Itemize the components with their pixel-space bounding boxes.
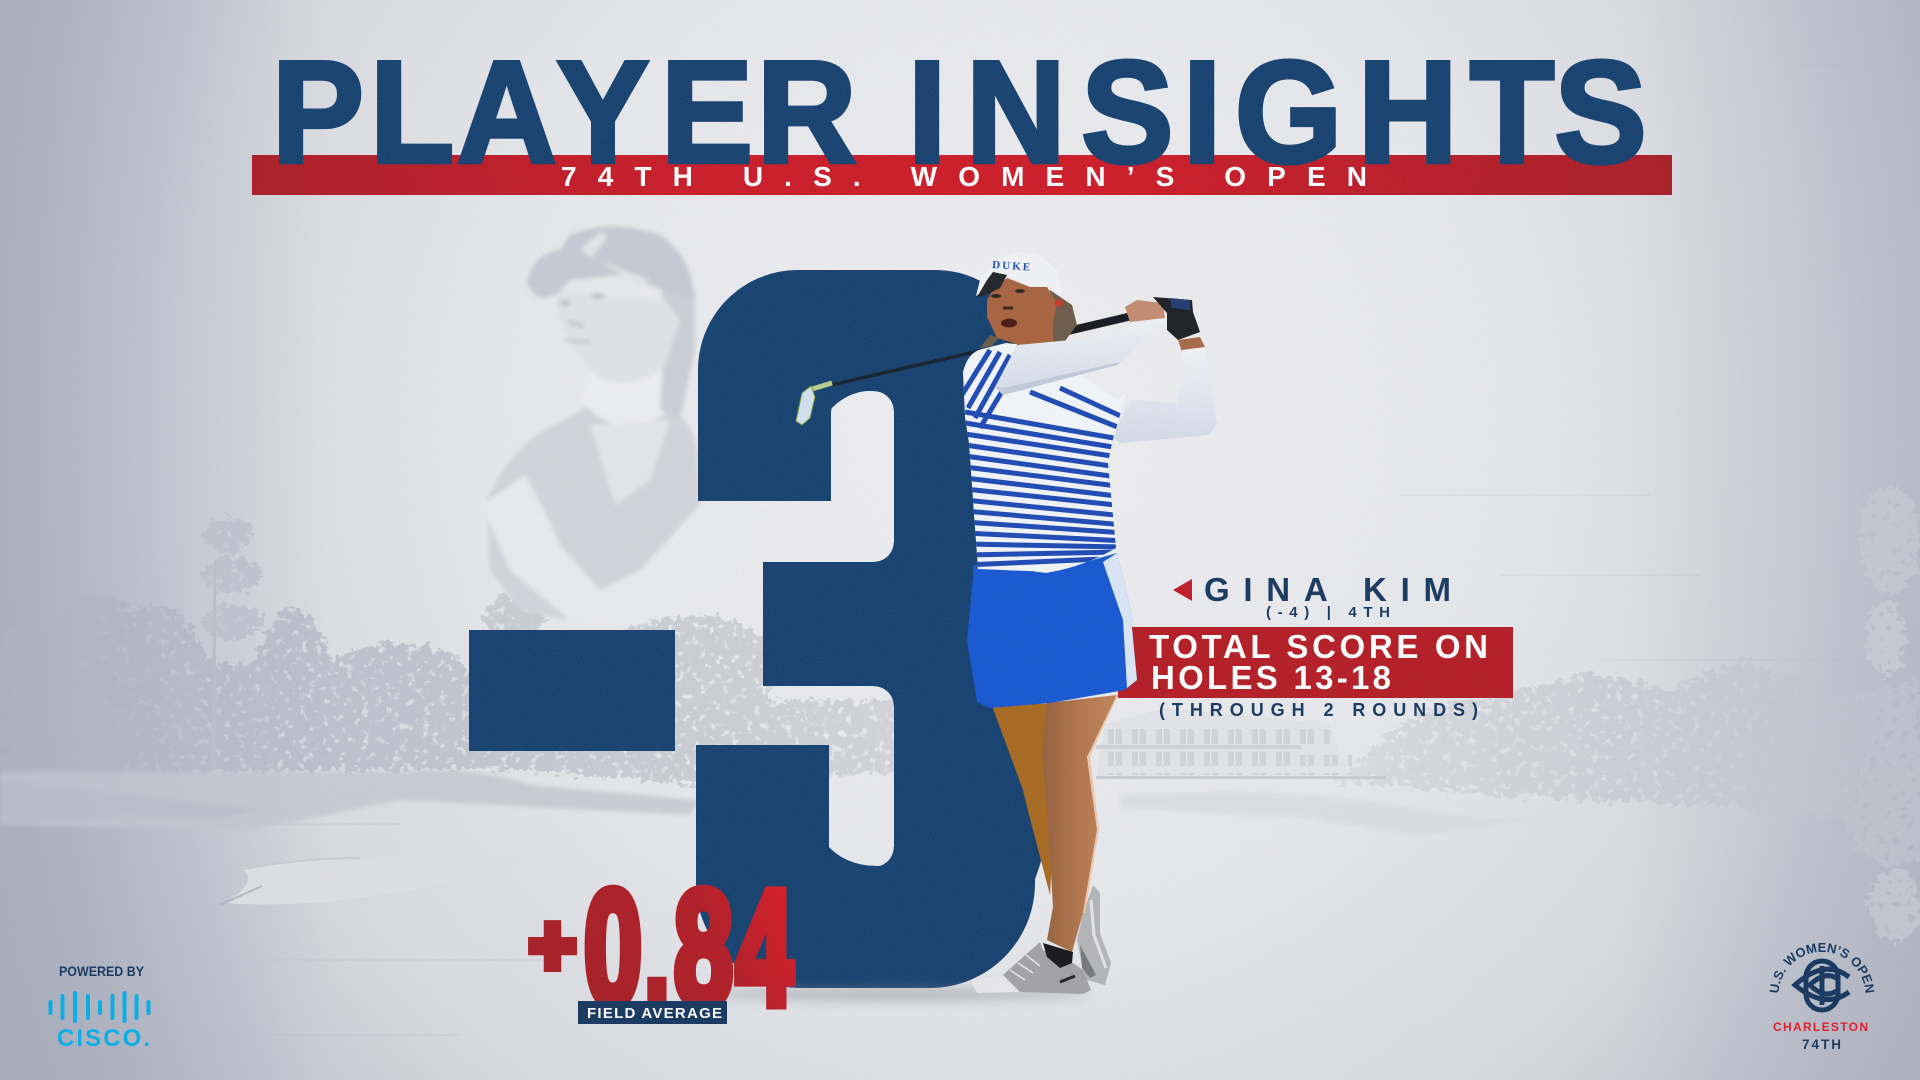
powered by: POWERED BY [59,963,145,979]
left tree line [0,517,895,785]
location: CHARLESTON [1773,1020,1868,1034]
field average stat: FIELD AVERAGE [587,1005,722,1022]
Cisco wordmark: CISCO. [57,1025,150,1052]
back shoe [1077,885,1111,985]
shadow under numeral and player [710,989,1090,999]
player name: GINA KIM [1204,571,1451,608]
stat note: (THROUGH 2 ROUNDS) [1159,700,1478,720]
trailing arm [1113,337,1217,443]
stat label line 2: HOLES 13-18 [1151,659,1391,696]
field average label [578,1001,727,1024]
ghost neck and undershirt [582,365,675,426]
title: PLAYER INSIGHTS [272,31,1647,193]
neck [1015,320,1062,350]
minus sign [469,630,675,751]
fairway mound, left [0,770,700,830]
face [987,278,1063,345]
plus value: . [642,856,672,1039]
arc title: U.S. WOMEN’S OPEN [1770,943,1874,993]
plus value: + [529,898,576,992]
skirt [967,553,1137,708]
plus value: 4 [736,856,793,1039]
ghost features [559,300,571,306]
plus value [529,856,793,1039]
player cutout [796,252,1217,994]
front leg [1042,695,1117,952]
big score: minus three [441,61,1074,1080]
clubhouse [1096,708,1386,779]
striped shirt [960,343,1126,572]
ghost hair [660,270,695,420]
leading arm [995,313,1163,395]
ghost face [553,290,680,383]
event logo [1770,943,1874,1052]
back leg [992,703,1060,895]
ghost cap [527,226,693,300]
title band [252,31,1672,195]
golf club [796,316,1132,425]
bunker [220,856,530,905]
cap lettering: DUKE [992,259,1031,274]
pine trunk [211,560,216,770]
emblem [1795,961,1849,1010]
player score and rank: (-4) | 4TH [1266,604,1390,621]
ghost arms [482,475,770,625]
hands and glove [1125,297,1200,340]
subtitle: 74TH U.S. WOMEN’S OPEN [561,161,1367,192]
front shoe [971,942,1091,994]
field average stat [529,856,793,1039]
cap [976,252,1063,297]
ghost shirt [487,400,710,620]
ghost portrait of player [482,226,770,625]
edition: 74TH [1802,1037,1841,1052]
sponsor: Cisco [50,963,150,1052]
info block [1118,571,1513,720]
red stat box [1118,627,1513,698]
right tree line [1335,485,1920,941]
plus value: 0 [584,856,642,1039]
background: golf course landscape [0,485,1920,941]
arrow pointer [1173,579,1192,601]
red band [252,155,1672,195]
Cisco bars [50,993,148,1021]
green, right [1120,792,1560,835]
stat label line 1: TOTAL SCORE ON [1149,628,1488,665]
hair [980,290,1077,348]
plus value: 8 [674,856,733,1039]
